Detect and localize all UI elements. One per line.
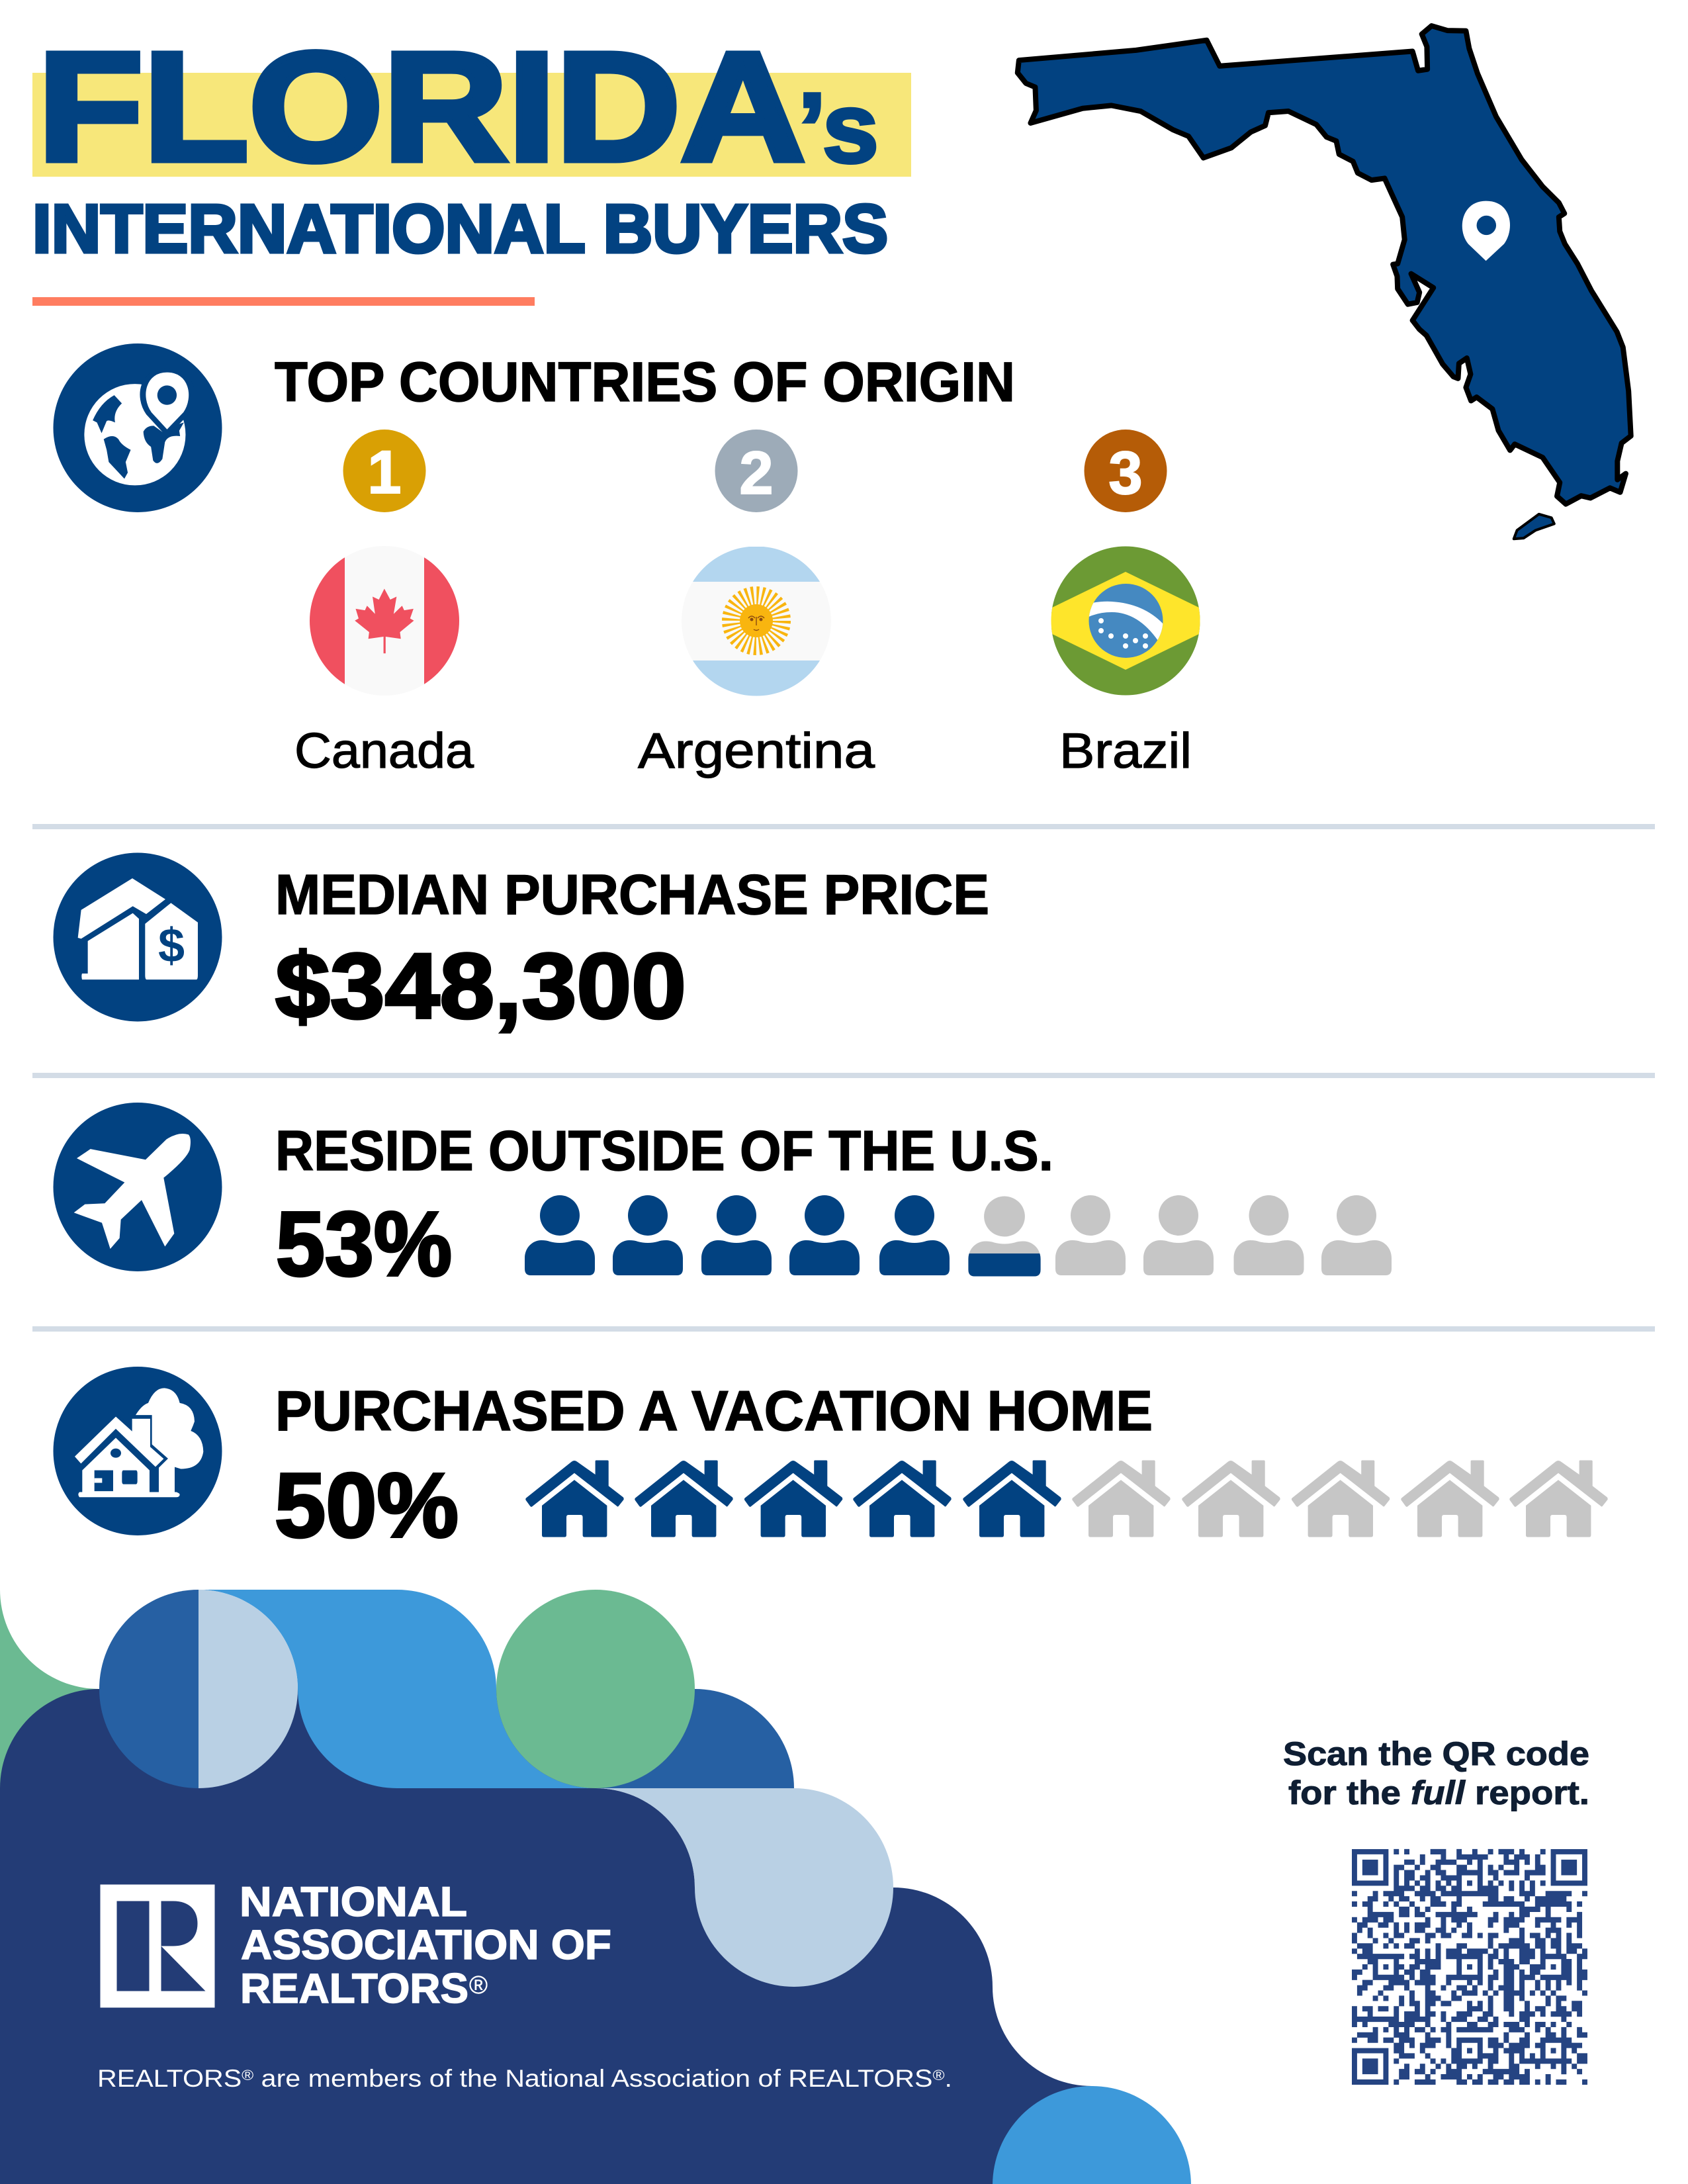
value: 50%: 50% (275, 1455, 459, 1557)
QR call to action: for the full report. (1288, 1774, 1589, 1811)
rank badge 1: 1 (367, 439, 402, 506)
label: Canada: Canada (294, 723, 474, 778)
logo text: National Association of Realtors (240, 1879, 611, 2012)
coral rule (32, 297, 535, 306)
icon: houses with dollar sign (53, 852, 222, 1022)
flag: Brazil (1051, 547, 1200, 695)
QR code (1352, 1849, 1587, 2085)
logo text: National Association of Realtors: ® (469, 1972, 488, 1999)
footer disclaimer: ® (242, 2067, 253, 2083)
value: 53%: 53% (276, 1193, 452, 1295)
rank badge 2: 2 (739, 439, 774, 507)
Florida map (1018, 26, 1631, 539)
logo: realtor R block (101, 1885, 214, 2008)
rank badge 1 (343, 430, 426, 512)
title highlight bar (32, 73, 911, 177)
icon: globe with pin (53, 343, 222, 512)
logo text: National Association of Realtors: REALTORS (240, 1966, 468, 2012)
pictogram: people 53 percent (525, 1195, 1392, 1276)
rank badge 3: 3 (1108, 439, 1143, 507)
label: Brazil: Brazil (1059, 723, 1192, 778)
flag: Argentina (693, 547, 820, 696)
footer disclaimer: ® (933, 2067, 945, 2083)
value: $348,300: $348,300 (275, 934, 686, 1038)
footer disclaimer: . (945, 2065, 952, 2092)
pictogram: houses 50 percent (525, 1460, 1608, 1537)
icon: vacation home with tree (53, 1367, 222, 1535)
FLORIDA's wordmark: FLORIDA (38, 20, 805, 193)
icon: airplane (53, 1103, 222, 1271)
icon: houses with dollar sign: $ (158, 919, 185, 972)
logo text: National Association of Realtors: ASSOCIATION OF (241, 1922, 611, 1968)
QR call to action (1283, 1735, 1589, 1811)
heading: purchased a vacation home: PURCHASED A VACATION HOME (275, 1380, 1153, 1443)
rank badge 2 (715, 430, 798, 512)
subtitle: INTERNATIONAL BUYERS (32, 191, 888, 267)
logo text: National Association of Realtors: NATIONAL (240, 1879, 467, 1925)
heading: median purchase price: MEDIAN PURCHASE PRICE (275, 864, 989, 927)
footer disclaimer: REALTORS (97, 2065, 227, 2092)
footer disclaimer: are members of the National Association of REALTORS (253, 2065, 933, 2092)
label: Argentina: Argentina (638, 723, 875, 778)
title (32, 20, 911, 193)
heading: top countries of origin: TOP COUNTRIES OF ORIGIN (275, 351, 1015, 413)
QR call to action: Scan the QR code (1283, 1735, 1589, 1772)
footer decorative panel (0, 1590, 1191, 2184)
rank badge 3 (1084, 430, 1167, 512)
FLORIDA's wordmark: ’s (798, 72, 879, 183)
heading: reside outside of the U.S.: RESIDE OUTSIDE OF THE U.S. (275, 1120, 1053, 1183)
flag: Canada (310, 557, 459, 684)
